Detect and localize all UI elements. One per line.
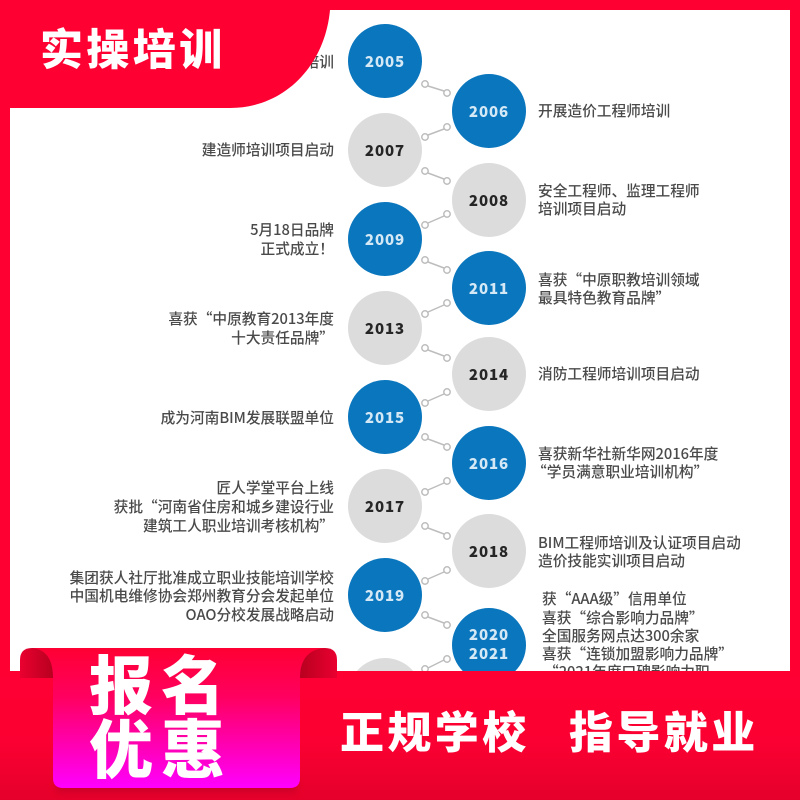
timeline node 2018: 2018 bbox=[469, 541, 509, 562]
text 2020 2021: 全国服务网点达300余家 bbox=[542, 625, 700, 646]
timeline node 2017 bbox=[348, 469, 422, 543]
text 2020 2021: 获“AAA级”信用单位 bbox=[542, 588, 687, 609]
text 2018: BIM工程师培训及认证项目启动 bbox=[538, 532, 741, 553]
timeline node 2020 2021: 2021 bbox=[469, 643, 509, 664]
text 2007: 建造师培训项目启动 bbox=[202, 139, 334, 160]
text 2009: 5月18日品牌 bbox=[250, 219, 334, 240]
text 2009: 正式成立！ bbox=[261, 238, 334, 259]
timeline node 2013 bbox=[348, 291, 422, 365]
text 2020 2021: 喜获“连锁加盟影响力品牌” bbox=[542, 643, 733, 664]
text 2018 bbox=[538, 532, 741, 571]
text 2016: 喜获新华社新华网2016年度 bbox=[538, 443, 719, 464]
timeline node 2020 2021 bbox=[452, 608, 526, 682]
right edge strip bbox=[790, 0, 800, 671]
text 2006: 开展造价工程师培训 bbox=[538, 100, 670, 121]
timeline node 2016 bbox=[452, 426, 526, 500]
ribbon text: 优惠 bbox=[89, 700, 233, 792]
text 2020 2021: 喜获“综合影响力品牌” bbox=[542, 607, 704, 628]
text 2019 bbox=[70, 567, 334, 625]
text 2005: 培训 bbox=[305, 51, 334, 72]
timeline connectors bbox=[422, 81, 450, 672]
timeline node 2005 bbox=[348, 24, 422, 98]
timeline node 2011 bbox=[452, 251, 526, 325]
slogan left: 正规学校 bbox=[340, 697, 530, 761]
text 2008: 安全工程师、监理工程师 bbox=[538, 180, 700, 201]
timeline node 2020 2021: 2020 bbox=[469, 624, 509, 645]
timeline node 2015 bbox=[348, 380, 422, 454]
timeline node 2014: 2014 bbox=[469, 364, 509, 385]
text 2014: 消防工程师培训项目启动 bbox=[538, 363, 700, 384]
text 2016: “学员满意职业培训机构” bbox=[532, 461, 708, 482]
text 2011: 喜获“中原职教培训领域 bbox=[538, 269, 700, 290]
timeline node 2019: 2019 bbox=[365, 585, 405, 606]
timeline node 2014 bbox=[452, 337, 526, 411]
timeline node 2017: 2017 bbox=[365, 496, 405, 517]
text 2016 bbox=[532, 443, 719, 482]
ribbon text: 报名 bbox=[89, 636, 233, 728]
text 2011: 最具特色教育品牌” bbox=[538, 287, 670, 308]
text 2020 2021: “2021年度口碑影响力职 bbox=[544, 661, 710, 682]
ribbon body bbox=[32, 648, 325, 788]
timeline node 2018 bbox=[452, 514, 526, 588]
text 2019: 中国机电维修协会郑州教育分会发起单位 bbox=[70, 585, 334, 606]
title: 实操培训 bbox=[40, 16, 226, 78]
text 2013: 十大责任品牌” bbox=[231, 327, 334, 348]
timeline node 2005: 2005 bbox=[365, 51, 405, 72]
text 2017: 获批“河南省住房和城乡建设行业 bbox=[114, 496, 334, 517]
timeline node 2011: 2011 bbox=[469, 278, 509, 299]
text 2019: OAO分校发展战略启动 bbox=[186, 604, 334, 625]
text 2017 bbox=[114, 477, 334, 536]
text 2017: 匠人学堂平台上线 bbox=[216, 477, 334, 498]
timeline node 2015: 2015 bbox=[365, 407, 405, 428]
timeline node 2006 bbox=[452, 74, 526, 148]
timeline node 2007 bbox=[348, 113, 422, 187]
timeline node 2008 bbox=[452, 163, 526, 237]
timeline node 2006: 2006 bbox=[469, 101, 509, 122]
text 2008: 培训项目启动 bbox=[538, 198, 626, 219]
timeline node 2019 bbox=[348, 558, 422, 632]
timeline node 2009 bbox=[348, 202, 422, 276]
timeline node partly hidden bbox=[348, 658, 422, 732]
text 2018: 造价技能实训项目启动 bbox=[538, 550, 685, 571]
ribbon left fold bbox=[20, 648, 53, 678]
slogan right: 指导就业 bbox=[569, 697, 759, 761]
text 2020 2021 bbox=[542, 588, 733, 682]
timeline node 2008: 2008 bbox=[469, 190, 509, 211]
text 2008 bbox=[538, 180, 700, 219]
ribbon badge bbox=[20, 636, 337, 792]
timeline node 2007: 2007 bbox=[365, 140, 405, 161]
text 2013 bbox=[168, 308, 334, 348]
timeline node 2013: 2013 bbox=[365, 318, 405, 339]
ribbon shadow bbox=[56, 780, 297, 792]
text 2011 bbox=[538, 269, 700, 308]
ribbon right fold bbox=[300, 648, 337, 678]
text 2015: 成为河南BIM发展联盟单位 bbox=[161, 407, 334, 428]
text 2017: 建筑工人职业培训考核机构” bbox=[143, 515, 334, 536]
timeline node 2009: 2009 bbox=[365, 229, 405, 250]
text 2013: 喜获“中原教育2013年度 bbox=[168, 308, 334, 329]
text 2009 bbox=[250, 219, 334, 259]
ribbon text bbox=[89, 636, 233, 792]
text 2019: 集团获人社厅批准成立职业技能培训学校 bbox=[70, 567, 334, 588]
timeline node 2016: 2016 bbox=[469, 453, 509, 474]
